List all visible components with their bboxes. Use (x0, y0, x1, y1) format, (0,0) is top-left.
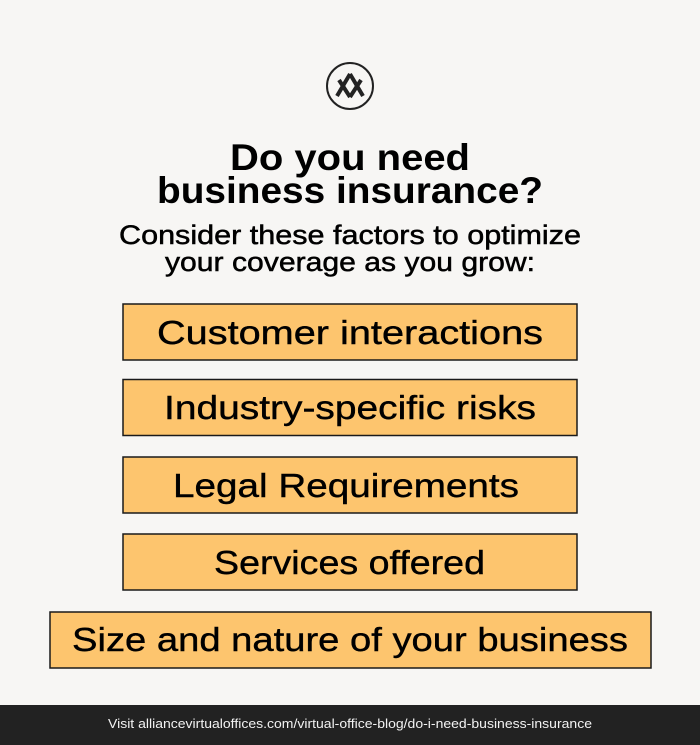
factor: customer interactions (123, 304, 577, 360)
title (157, 137, 543, 211)
factor: legal requirements: Legal Requirements (173, 467, 519, 504)
footer bar: Visit alliancevirtualoffices.com/virtual-office-blog/do-i-need-business-insurance (108, 716, 592, 731)
title: Do you need (230, 137, 470, 178)
factor: industry-specific risks: Industry-specific risks (164, 389, 536, 426)
factor: size and nature of your business (50, 612, 651, 668)
title: business insurance? (157, 170, 543, 211)
factor: legal requirements (123, 457, 577, 513)
subtitle (119, 220, 581, 277)
footer bar (0, 705, 700, 745)
subtitle: Consider these factors to optimize (119, 220, 581, 250)
factor: services offered: Services offered (214, 544, 485, 581)
factor: customer interactions: Customer interactions (157, 314, 543, 351)
subtitle: your coverage as you grow: (165, 247, 535, 277)
factor: industry-specific risks (123, 380, 577, 436)
icon: mountain logo (327, 63, 373, 109)
factor: size and nature of your business: Size and nature of your business (72, 621, 628, 658)
factor: services offered (123, 534, 577, 590)
